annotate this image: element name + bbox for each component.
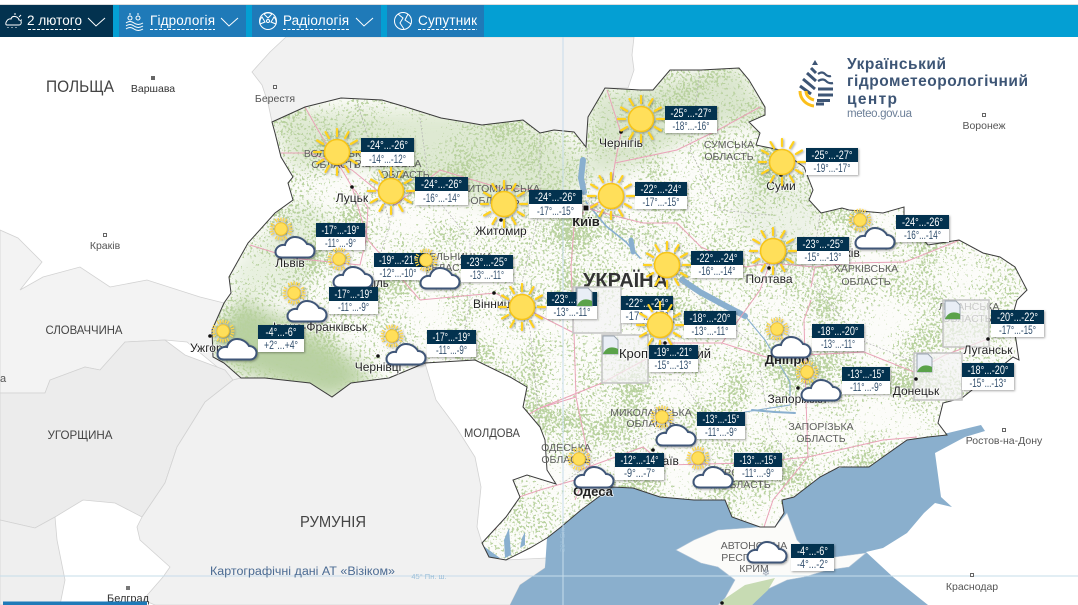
- oblast labels: ОБЛАСТЬ: [942, 313, 992, 325]
- weather: Khmelnytskyi: -23°...-25°: [466, 257, 508, 269]
- oblast labels: РЕСПУБЛІКА: [721, 552, 787, 564]
- country and foreign city labels: а: [0, 373, 7, 385]
- nav: radiology: Радіологія: [283, 13, 349, 28]
- oblast labels: ОБЛАСТЬ: [423, 262, 473, 274]
- weather: Ivano-Frankivsk: -11°...-9°: [338, 302, 369, 314]
- weather: Zaporizhzhia: [796, 360, 890, 400]
- rivers and reservoirs: [581, 160, 795, 425]
- weather: Odesa: [568, 448, 664, 488]
- city labels: Миколаїв: [627, 454, 679, 468]
- city labels: Запоріжжя: [768, 392, 826, 406]
- weather: Kherson: -13°...-15°: [740, 455, 776, 467]
- nav: date selector: 2 лютого: [27, 13, 82, 28]
- country and foreign city labels: УГОРЩИНА: [48, 428, 112, 442]
- oblast labels: КРИМ: [739, 563, 769, 575]
- country and foreign city labels: Краків: [90, 240, 121, 252]
- city labels: Луганськ: [964, 343, 1013, 357]
- city labels: Кропивницький: [619, 346, 711, 361]
- weather: Zaporizhzhia: -11°...-9°: [850, 382, 882, 394]
- weather: Kremenchuk: -18°...-20°: [690, 313, 730, 325]
- weather: Chernivtsi: [380, 324, 476, 364]
- nav: satellite: [387, 5, 484, 37]
- weather: Cherkasy: -22°...-24°: [696, 253, 738, 265]
- weather: Ternopil: -12°...-10°: [380, 268, 416, 280]
- logo text: гідрометеорологічний: [847, 73, 1028, 90]
- oblast labels: ОБЛАСТЬ: [704, 151, 754, 163]
- weather: Kyiv: -22°...-24°: [640, 184, 682, 196]
- credit: map data: Картографічні дані АТ «Візіком»: [210, 566, 395, 578]
- city labels: Київ: [572, 214, 600, 229]
- weather: Odesa: -12°...-14°: [620, 455, 658, 467]
- weather: Cherkasy: -16°...-14°: [698, 266, 736, 278]
- weather: Poltava: -15°...-13°: [804, 252, 842, 264]
- weather: Mykolaiv: -13°...-15°: [702, 414, 740, 426]
- weather: Lviv: [270, 218, 365, 258]
- country and foreign city labels: Ростов-на-Дону: [966, 435, 1043, 447]
- country and foreign city labels: Берестя: [255, 93, 295, 105]
- weather: Kropyvnytskyi: -15°...-13°: [654, 360, 692, 372]
- weather: Kremenchuk: -13°...-11°: [692, 326, 728, 338]
- weather: Kharkiv: -16°...-14°: [904, 230, 941, 242]
- weather: Ivano-Frankivsk: -17°...-19°: [334, 289, 372, 301]
- city labels: Івано-Франківськ: [273, 320, 368, 334]
- oblast labels: ОБЛАСТЬ: [626, 418, 676, 430]
- oblast labels: АВТОНОМНА: [721, 540, 787, 552]
- weather: Dnipro: [766, 318, 864, 358]
- sea: Black Sea and Sea of Azov: [510, 425, 985, 605]
- weather: Kharkiv: -24°...-26°: [902, 217, 943, 229]
- weather: Zhytomyr: -17°...-15°: [537, 206, 574, 218]
- icon: cloud with sun: [6, 13, 22, 28]
- oblast labels: ВОЛИНСЬКА: [304, 148, 368, 160]
- oblast labels: ОБЛАСТЬ: [796, 433, 846, 445]
- oblast labels: ОБЛАСТЬ: [841, 276, 891, 288]
- weather: Sumy: -19°...-17°: [814, 163, 850, 175]
- oblast labels: ЛУГАНСЬКА: [939, 301, 999, 313]
- weather: Kropyvnytskyi: [649, 345, 698, 372]
- weather: Mykolaiv: -11°...-9°: [705, 427, 737, 439]
- oblast labels: ОБЛАСТЬ: [311, 159, 361, 171]
- weather: Luhansk: -20°...-22°: [997, 312, 1038, 324]
- country and foreign city labels: Воронеж: [962, 120, 1006, 132]
- weather: Crimea: [748, 542, 834, 571]
- weather: Crimea: -4°...-2°: [797, 559, 828, 571]
- weather: Donetsk: -15°...-13°: [970, 378, 1006, 390]
- city labels: Суми: [766, 179, 796, 193]
- weather: Luhansk: [991, 310, 1044, 337]
- nav: radiology: [252, 5, 381, 37]
- oblast labels: РІВНЕНСЬКА: [355, 158, 421, 170]
- weather: Luhansk: -17°...-15°: [999, 325, 1036, 337]
- weather: Uzhhorod: -4°...-6°: [266, 327, 296, 339]
- weather: Chernivtsi: -17°...-19°: [432, 332, 470, 344]
- weather: Uzhhorod: +2°...+4°: [264, 340, 298, 352]
- logo text: Український: [847, 56, 946, 73]
- weather: Kharkiv: [848, 208, 949, 248]
- oblast borders: [358, 70, 960, 485]
- oblast labels: ОДЕСЬКА: [541, 442, 591, 454]
- graticule label: 45° Пн. ш.: [411, 572, 447, 581]
- weather: Khmelnytskyi: [414, 248, 513, 288]
- oblast labels: ОБЛАСТЬ: [721, 479, 771, 491]
- oblast labels: ХЕРСОНСЬКА: [710, 467, 782, 479]
- country and foreign city labels: МОЛДОВА: [464, 426, 520, 440]
- weather: Mykolaiv: [650, 406, 745, 446]
- weather: Chernihiv: [618, 96, 717, 142]
- weather: central box: -22°...-24°: [626, 298, 668, 310]
- Danube lagoons: [482, 528, 525, 558]
- oblast labels: ЗАПОРІЗЬКА: [788, 421, 854, 433]
- city labels: Тернопіль: [335, 278, 389, 290]
- weather: Ivano-Frankivsk: [282, 282, 378, 322]
- oblast labels: СУМСЬКА: [704, 139, 754, 151]
- weather: Lutsk: -24°...-26°: [367, 140, 408, 152]
- weather: Vinnytsia: -13°...-11°: [554, 307, 590, 319]
- country: Ukraine: [212, 68, 1028, 560]
- weather: Kyiv: -17°...-15°: [642, 197, 680, 209]
- city labels: Чернігів: [599, 136, 643, 150]
- weather: Odesa: -9°...-7°: [624, 468, 655, 480]
- weather: Lutsk: -14°...-12°: [369, 154, 406, 166]
- country and foreign city labels: Краснодар: [946, 581, 998, 593]
- icon: striped droplet: [799, 60, 833, 106]
- city labels: Одеса: [573, 484, 614, 499]
- weather: Poltava: [750, 228, 849, 274]
- weather: Lviv: -17°...-19°: [322, 225, 360, 237]
- country and foreign city labels: ПОЛЬЩА: [46, 77, 115, 96]
- weather: Rivne: -16°...-14°: [423, 193, 460, 205]
- weather: Kremenchuk: [637, 302, 736, 348]
- city labels: Дніпро: [765, 352, 809, 367]
- city labels: Вінниця: [473, 297, 517, 311]
- city labels: Донецьк: [893, 384, 940, 398]
- nav: date selector: [0, 5, 113, 37]
- city labels: Чернівці: [355, 360, 401, 374]
- weather: Kherson: -11°...-9°: [742, 468, 774, 480]
- weather: Kropyvnytskyi: -19°...-21°: [654, 347, 692, 359]
- weather: Khmelnytskyi: -13°...-11°: [470, 270, 504, 282]
- oblast labels: [304, 139, 999, 575]
- weather: Uzhhorod: [212, 320, 304, 360]
- country: Croatia: [0, 517, 65, 605]
- country and foreign city labels: СЛОВАЧЧИНА: [46, 323, 122, 337]
- country: Belarus: [252, 37, 634, 147]
- weather: Zhytomyr: [481, 181, 582, 227]
- icon: radiation: [260, 12, 276, 30]
- country title: Ukraine: УКРАЇНА: [583, 269, 668, 292]
- weather: Chernivtsi: -11°...-9°: [436, 345, 467, 357]
- weather: Sumy: [759, 139, 858, 185]
- nav: hydrology: [119, 5, 246, 37]
- country: Hungary: [0, 340, 233, 528]
- weather: Crimea: -4°...-6°: [797, 546, 828, 558]
- forest zones: [213, 65, 830, 400]
- city labels: Харків: [824, 246, 860, 260]
- city labels: Полтава: [746, 272, 793, 286]
- weather: Rivne: -24°...-26°: [421, 179, 462, 191]
- weather: Chernihiv: -18°...-16°: [672, 121, 710, 133]
- weather: Donetsk: -18°...-20°: [968, 365, 1008, 377]
- nav: hydrology: Гідрологія: [150, 13, 215, 28]
- weather: Zaporizhzhia: -13°...-15°: [848, 369, 884, 381]
- oblast labels: ОБЛАСТЬ: [380, 169, 430, 181]
- weather: Cherkasy: [644, 242, 743, 288]
- oblast labels: ОБЛАСТЬ: [541, 454, 591, 466]
- weather: Lviv: -11°...-9°: [325, 238, 356, 250]
- oblast labels: ЖИТОМИРСЬКА: [458, 183, 540, 195]
- graticule label 30E: 30° Сх.: [558, 527, 567, 552]
- roads: [250, 90, 986, 530]
- city labels: [190, 130, 1013, 605]
- weather: Lutsk: [314, 129, 414, 175]
- country: Slovakia and Czechia: [0, 230, 241, 393]
- city labels: Луцьк: [336, 191, 369, 205]
- country: Crimea: [676, 513, 866, 605]
- header bar: [0, 0, 1078, 37]
- weather: Poltava: -23°...-25°: [802, 239, 844, 251]
- weather: Zhytomyr: -24°...-26°: [535, 192, 576, 204]
- country and foreign city labels: Варшава: [131, 83, 175, 95]
- city labels: Львів: [275, 256, 305, 270]
- icon: snowflake Crimea: ❄: [762, 568, 770, 579]
- oblast labels: ХМЕЛЬНИЦЬКА: [413, 251, 493, 263]
- weather: Vinnytsia: [499, 284, 597, 330]
- weather: Rivne: [368, 168, 468, 214]
- weather: Dnipro: -13°...-11°: [821, 339, 855, 351]
- logo url: meteo.gov.ua: [847, 108, 913, 120]
- weather: Kyiv: [588, 173, 687, 219]
- city labels: Житомир: [475, 224, 527, 238]
- logo text: центр: [847, 91, 897, 108]
- country: Romania: [137, 363, 547, 605]
- logo: Ukrainian Hydrometeorological Center: [799, 56, 1028, 120]
- weather: Donetsk: [962, 363, 1014, 390]
- weather: Kherson: [686, 446, 782, 488]
- weather: Dnipro: -18°...-20°: [818, 326, 858, 338]
- country and foreign city labels: Белград: [107, 593, 150, 605]
- oblast labels: ХАРКІВСЬКА: [834, 263, 898, 275]
- weather: central box: -17°...-15°: [626, 311, 668, 323]
- weather: central box: [621, 296, 673, 323]
- icon: globe: [394, 12, 412, 30]
- weather: Vinnytsia: -23°...-25°: [552, 294, 592, 306]
- image placeholders: [573, 287, 989, 400]
- Crimean mountains: [720, 578, 775, 605]
- weather: Sumy: -25°...-27°: [812, 150, 852, 162]
- country and foreign city labels: РУМУНІЯ: [300, 514, 366, 531]
- oblast labels: ОБЛАСТЬ: [470, 195, 520, 207]
- weather: Chernihiv: -25°...-27°: [670, 108, 712, 120]
- logo text: [847, 56, 1028, 108]
- weather: Ternopil: [328, 248, 426, 288]
- bottom progress bar: [3, 602, 147, 605]
- icon: water: [126, 13, 143, 30]
- city labels: Ужгород: [190, 341, 236, 355]
- oblast labels: МИКОЛАЇВСЬКА: [610, 407, 692, 419]
- nav: satellite: Супутник: [418, 13, 477, 28]
- weather: Ternopil: -19°...-21°: [379, 255, 417, 267]
